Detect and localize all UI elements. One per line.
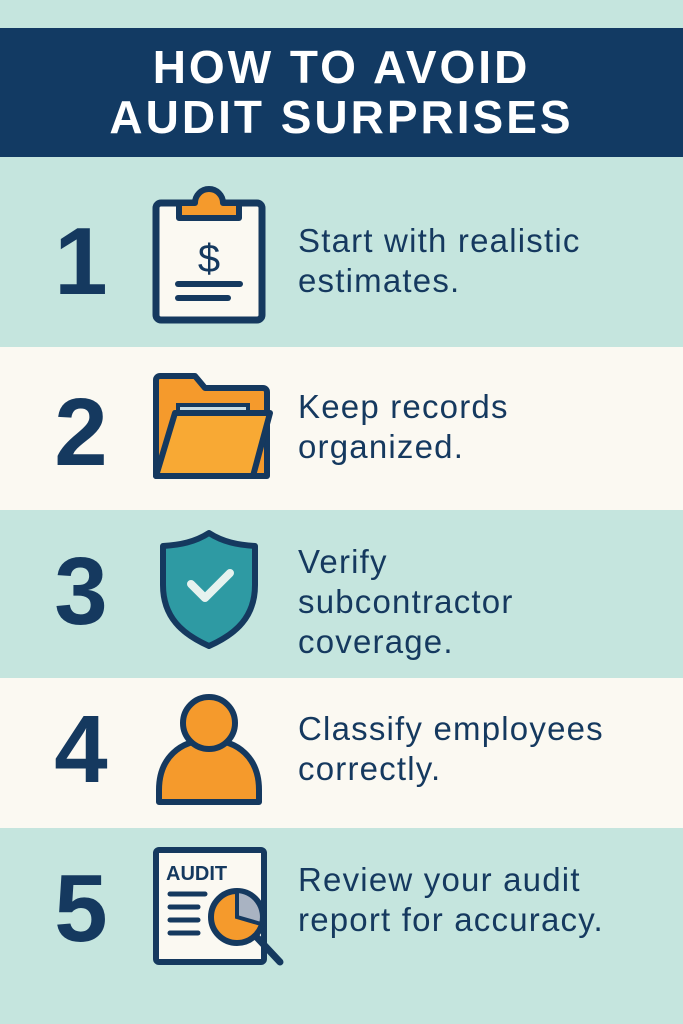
text 4: Classify employees [298, 710, 604, 747]
title [109, 41, 574, 143]
text 4 [298, 710, 604, 787]
number 3: 3 [54, 538, 108, 645]
icon: clipboard dollar: $ [198, 237, 220, 281]
number 1: 1 [54, 208, 108, 315]
row 4 [0, 678, 683, 828]
text 2: organized. [298, 428, 464, 465]
text 3: Verify [298, 543, 388, 580]
text 5: report for accuracy. [298, 901, 604, 938]
row 5 [0, 828, 683, 1024]
number 5: 5 [54, 855, 108, 962]
text 1 [298, 222, 581, 299]
icon: shield check [160, 530, 258, 649]
text 5 [298, 861, 604, 938]
text 1: Start with realistic [298, 222, 581, 259]
title: HOW TO AVOID [153, 41, 530, 93]
icon: person [156, 694, 262, 805]
text 2: Keep records [298, 388, 509, 425]
text 2 [298, 388, 509, 465]
row 2 [0, 347, 683, 510]
icon: audit report [153, 847, 284, 966]
row 1 [0, 157, 683, 347]
number 4: 4 [54, 696, 108, 803]
icon: clipboard dollar [152, 186, 266, 324]
text 3 [298, 543, 514, 660]
text 3: subcontractor [298, 583, 514, 620]
text 3: coverage. [298, 623, 454, 660]
icon: audit report: AUDIT [166, 863, 227, 885]
number 2: 2 [54, 379, 108, 486]
header band [0, 28, 683, 157]
text 1: estimates. [298, 262, 460, 299]
title: AUDIT SURPRISES [109, 91, 574, 143]
icon: folder [153, 373, 273, 479]
text 5: Review your audit [298, 861, 581, 898]
text 4: correctly. [298, 750, 441, 787]
row 3 [0, 510, 683, 678]
